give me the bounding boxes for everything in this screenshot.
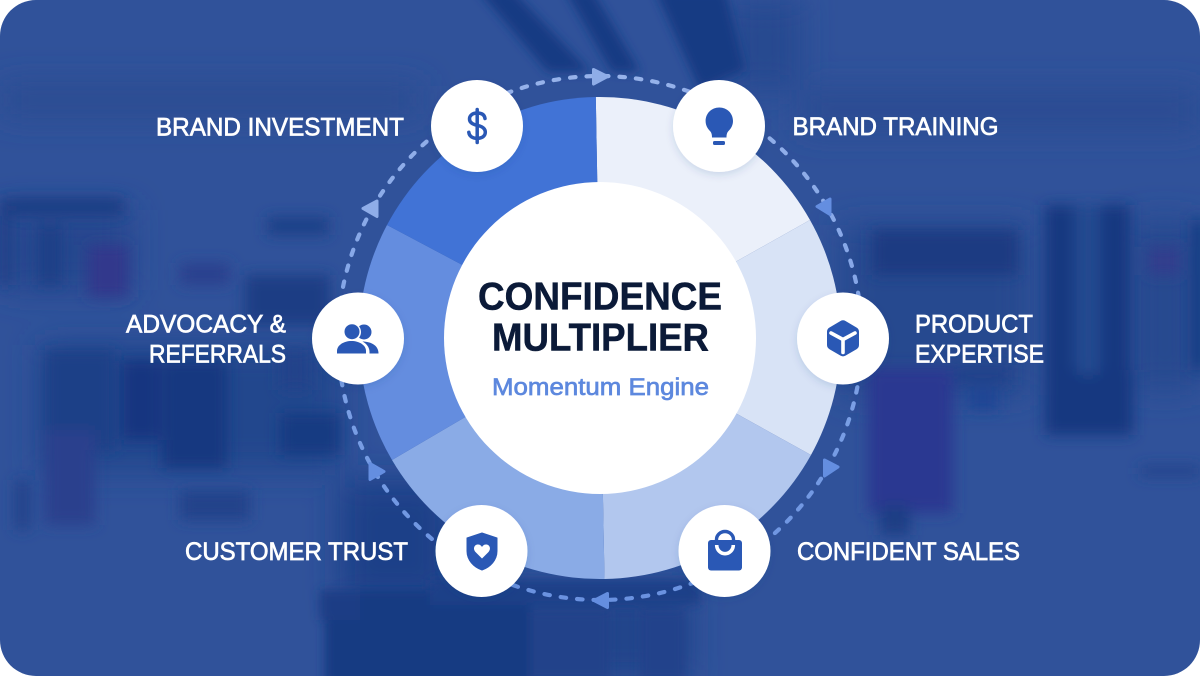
node: customer trust icon: [436, 505, 528, 597]
arrow: upper right: [817, 199, 830, 214]
node: advocacy and referrals icon: [312, 292, 404, 384]
segment: customer trust: [392, 338, 604, 579]
label: brand investment: BRAND INVESTMENT: [156, 114, 404, 142]
node: product expertise icon: [797, 292, 889, 384]
chart: six-segment wheel: [359, 97, 841, 579]
segment: advocacy and referrals: [359, 225, 600, 460]
label: product expertise: EXPERTISE: [915, 340, 1044, 368]
arrow: top: [594, 70, 608, 84]
label: confident sales: CONFIDENT SALES: [797, 538, 1020, 566]
title: CONFIDENCE: [478, 276, 722, 318]
title: [478, 276, 722, 360]
segment: confident sales: [600, 338, 811, 579]
label: product expertise: PRODUCT: [915, 311, 1033, 339]
node: brand investment icon: [431, 80, 523, 172]
label: product expertise: [915, 311, 1044, 368]
label: brand training: BRAND TRAINING: [792, 113, 998, 141]
arrow: upper left: [363, 201, 377, 216]
node: brand training icon: [673, 80, 765, 172]
label: customer trust: CUSTOMER TRUST: [185, 538, 408, 566]
segment: brand investment: [387, 97, 600, 338]
subtitle: Momentum Engine: [492, 374, 709, 401]
arrow: lower right: [824, 460, 838, 476]
dashed cycle ring: [338, 76, 862, 600]
center hub: [444, 182, 756, 494]
label: advocacy and referrals: ADVOCACY &: [126, 311, 286, 339]
title: MULTIPLIER: [492, 316, 709, 360]
node: confident sales icon: [678, 505, 770, 597]
segment: product expertise: [600, 220, 841, 455]
label: advocacy and referrals: [126, 311, 286, 368]
arrow: lower left: [370, 464, 384, 480]
arrow: bottom: [594, 594, 608, 608]
segment: brand training: [596, 97, 810, 338]
label: advocacy and referrals: REFERRALS: [149, 340, 286, 368]
